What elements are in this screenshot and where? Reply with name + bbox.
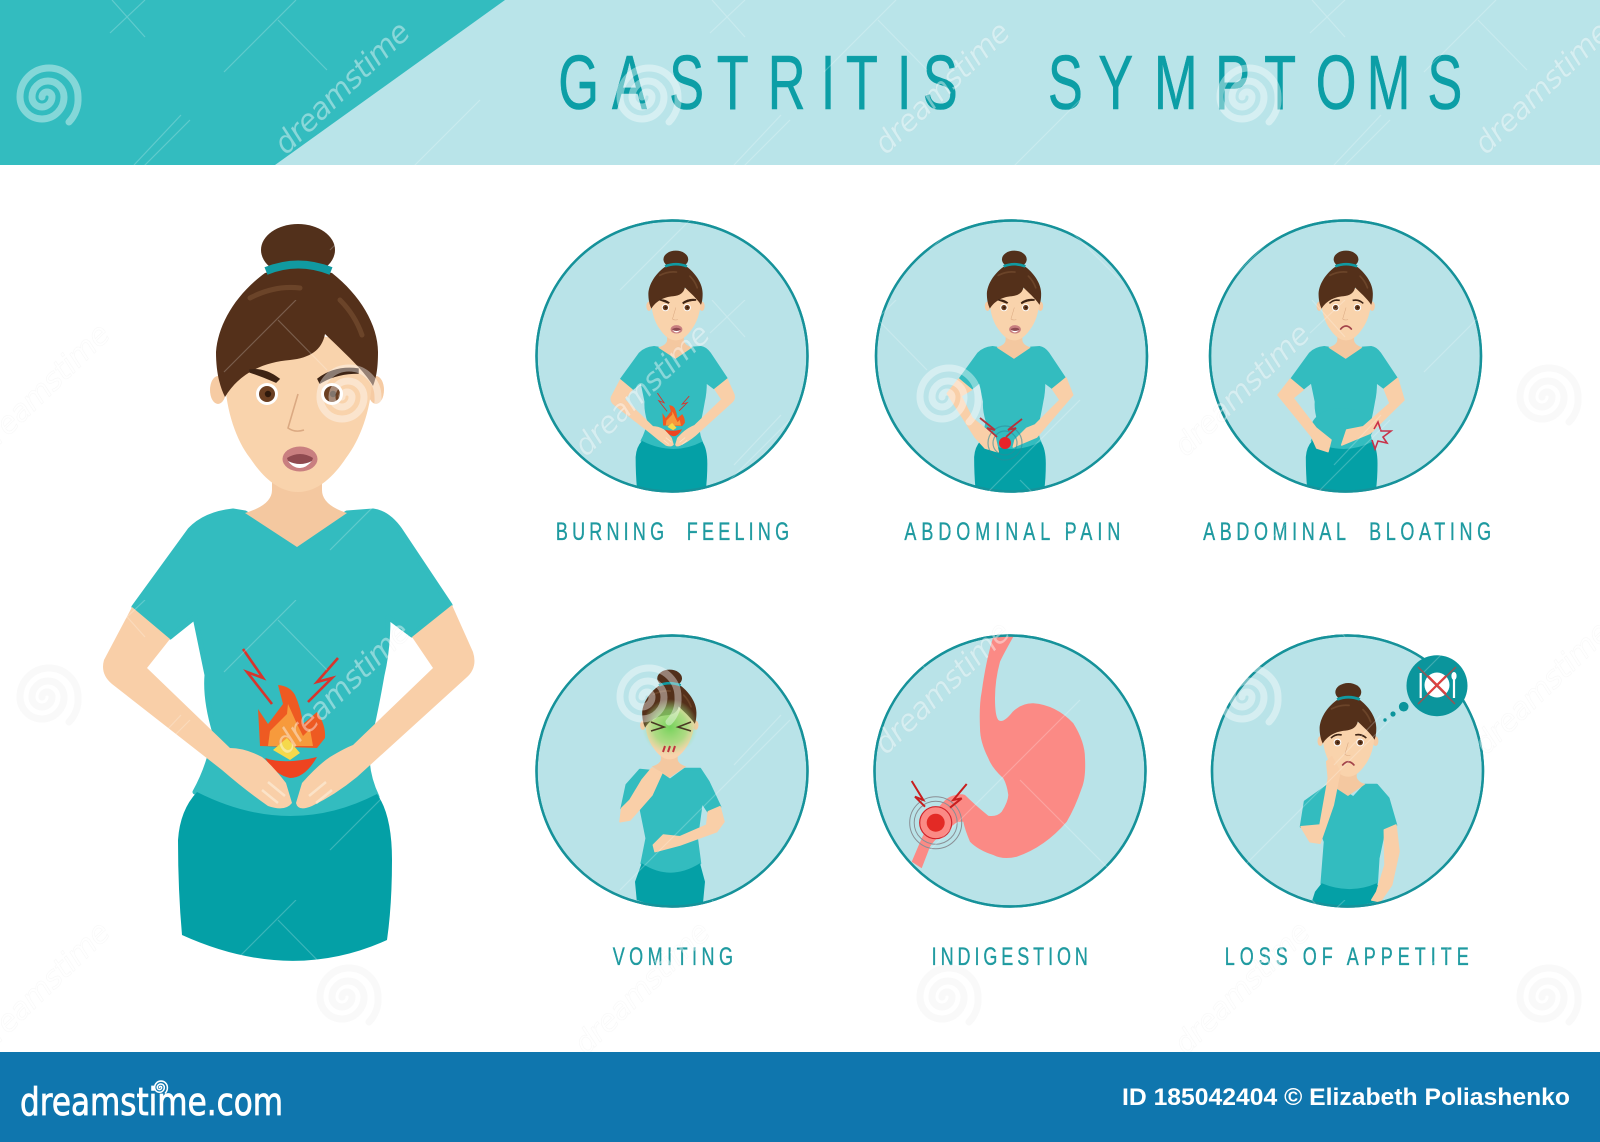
- footer logo text: dreamstime.com: [20, 1080, 283, 1124]
- footer bar: [0, 1052, 1600, 1142]
- watermark text: dreamstime: [1167, 915, 1317, 1062]
- watermark text: dreamstime: [867, 615, 1017, 762]
- label: loss of appetite: LOSS OF APPETITE: [1225, 942, 1469, 971]
- watermark text: dreamstime: [1167, 317, 1317, 464]
- footer logo spiral: [155, 1081, 167, 1093]
- figure: loss of appetite: [1301, 683, 1399, 908]
- panel: abdominal pain: [876, 220, 1147, 546]
- watermark text: dreamstime: [867, 15, 1017, 162]
- label: indigestion: INDIGESTION: [932, 942, 1088, 971]
- watermark text: dreamstime: [567, 317, 717, 464]
- watermark text: dreamstime: [267, 615, 417, 762]
- panel: loss of appetite: [1212, 636, 1483, 971]
- label: abdominal bloating: ABDOMINAL BLOATING: [1203, 517, 1491, 546]
- figure: burning feeling: [611, 251, 735, 497]
- panel: indigestion: [874, 636, 1146, 971]
- header band: [0, 0, 1600, 165]
- watermark text: dreamstime: [267, 15, 417, 162]
- watermark text: dreamstime: [567, 915, 717, 1062]
- footer credit: ID 185042404 © Elizabeth Poliashenko: [1122, 1084, 1570, 1111]
- panel: burning feeling: [536, 220, 808, 546]
- stomach illustration: [910, 637, 1085, 868]
- figure: abdominal pain: [947, 251, 1073, 497]
- label: abdominal pain: ABDOMINAL PAIN: [904, 517, 1120, 546]
- figure: vomiting: [620, 670, 724, 907]
- icon: thought bubble with crossed plate: [1383, 655, 1468, 722]
- figure: abdominal bloating: [1278, 251, 1404, 497]
- title: GASTRITIS SYMPTOMS: [558, 39, 1462, 125]
- main figure: woman with burning stomach: [103, 224, 474, 961]
- panel: vomiting: [536, 636, 808, 971]
- label: vomiting: VOMITING: [613, 942, 733, 971]
- panel: abdominal bloating: [1203, 220, 1491, 546]
- label: burning feeling: BURNING FEELING: [556, 517, 789, 546]
